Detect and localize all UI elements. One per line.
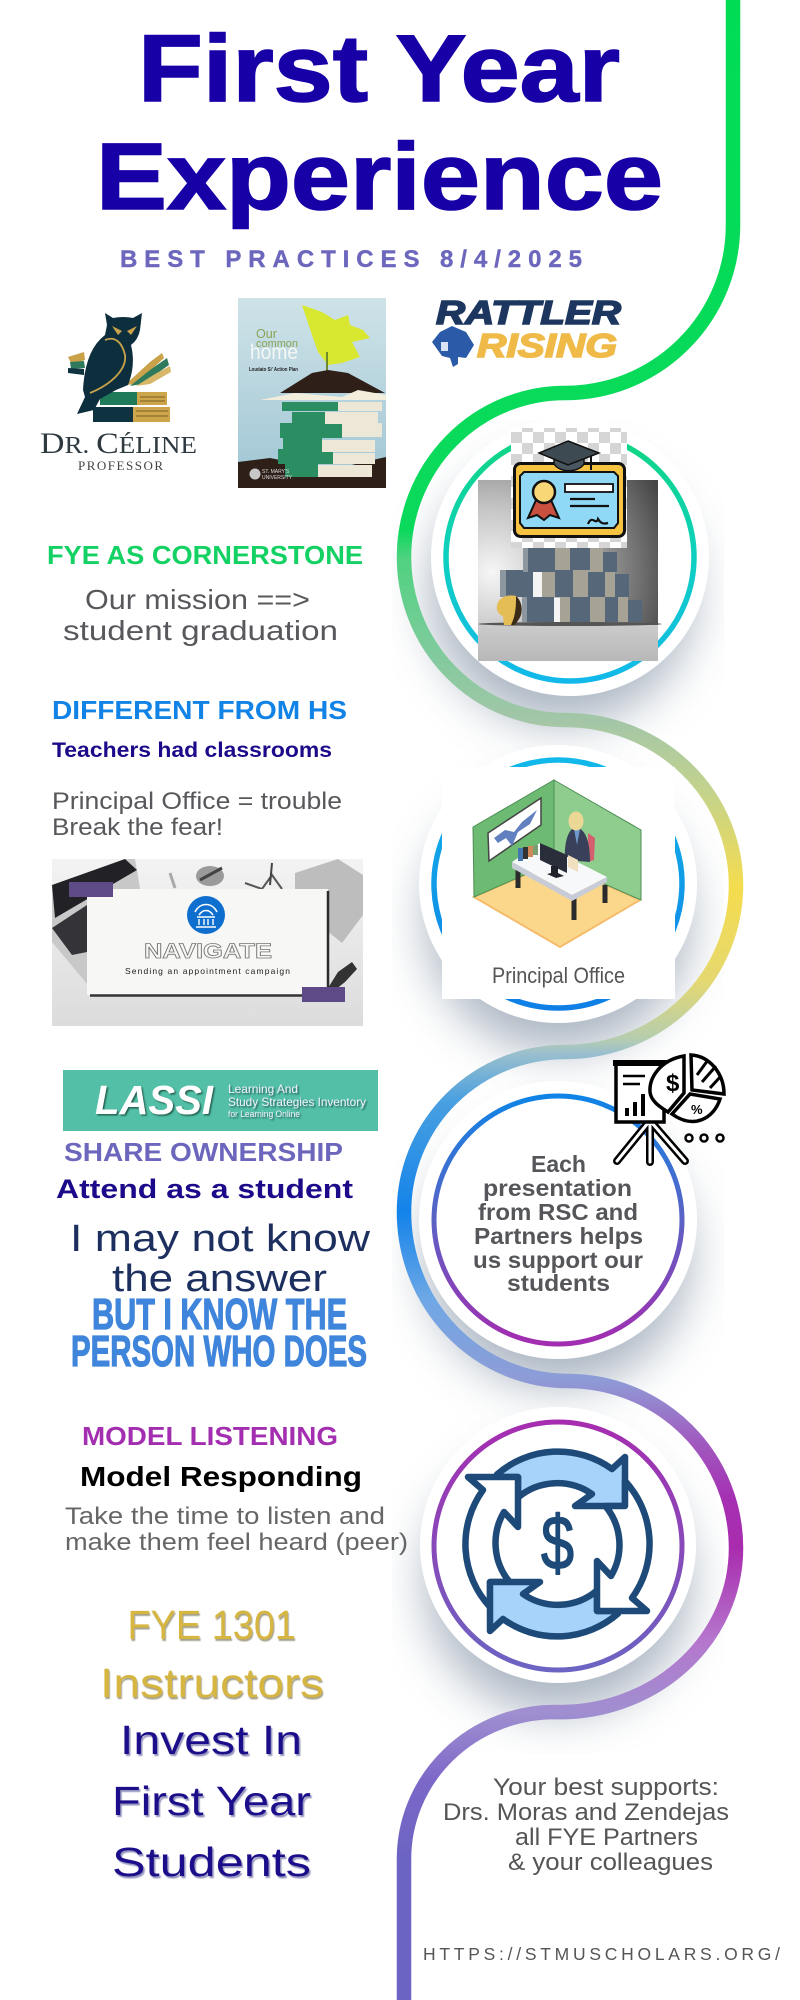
grey photo with block wall xyxy=(478,480,662,661)
section: share ownership: PERSON WHO DOES xyxy=(71,1327,367,1376)
circle 3 text: students xyxy=(507,1270,610,1296)
circle 3 text: Each xyxy=(531,1151,586,1177)
website url: HTTPS://STMUSCHOLARS.ORG/ xyxy=(423,1944,780,1964)
supports text block xyxy=(443,1774,729,1876)
section: different from HS: Teachers had classrooms xyxy=(52,739,332,762)
banner: LASSI: Learning And xyxy=(228,1082,298,1096)
section: FYE 1301 instructors: FYE 1301 xyxy=(128,1602,296,1648)
section: FYE as cornerstone: student graduation xyxy=(63,615,338,646)
circle 3 text xyxy=(473,1151,643,1296)
icon: circular arrows with dollar sign: $ xyxy=(541,1501,574,1586)
supports text block: Drs. Moras and Zendejas xyxy=(443,1799,729,1826)
poster: Our common home: Our xyxy=(256,326,278,341)
circle 3: presentations xyxy=(419,1055,724,1359)
icon: isometric office room xyxy=(473,780,641,947)
section: FYE 1301 instructors: Students xyxy=(112,1839,311,1885)
icon: presentation board and pie chart: % xyxy=(691,1102,703,1117)
section: different from HS xyxy=(52,695,347,841)
icon: circular arrows with dollar sign xyxy=(465,1452,650,1636)
banner: LASSI: LASSI xyxy=(95,1077,215,1123)
supports text block: Your best supports: xyxy=(493,1774,719,1801)
title: Experience xyxy=(96,124,663,230)
section: share ownership: Attend as a student xyxy=(56,1174,353,1204)
circle 3 text: from RSC and xyxy=(478,1199,638,1225)
circle 2: principal office xyxy=(419,745,697,1023)
section: share ownership: the answer xyxy=(112,1258,327,1300)
logo: Dr. Céline owl: DR. CÉLINE xyxy=(40,427,197,460)
section: FYE as cornerstone xyxy=(47,540,363,646)
logo: Dr. Céline owl xyxy=(40,313,197,473)
section: share ownership: SHARE OWNERSHIP xyxy=(64,1137,343,1167)
logo: Dr. Céline owl: PROFESSOR xyxy=(78,458,163,473)
section: model listening: make them feel heard (peer) xyxy=(65,1529,408,1556)
winding gradient path xyxy=(404,0,736,2000)
section: share ownership: BUT I KNOW THE xyxy=(92,1290,347,1339)
subtitle: BEST PRACTICES 8/4/2025 xyxy=(120,246,582,273)
title: First Year xyxy=(138,16,620,122)
section: model listening: MODEL LISTENING xyxy=(82,1421,338,1451)
icon: presentation board and pie chart: $ xyxy=(666,1070,680,1097)
section: FYE 1301 instructors: First Year xyxy=(112,1778,311,1824)
poster: Our common home: UNIVERSITY xyxy=(262,475,293,481)
banner: LASSI: Study Strategies Inventory xyxy=(228,1095,366,1109)
icon: presentation board and pie chart xyxy=(613,1055,724,1162)
section: FYE as cornerstone: Our mission ==> xyxy=(85,584,310,615)
circle 1: cornerstone xyxy=(431,418,709,696)
section: model listening: Model Responding xyxy=(80,1461,362,1492)
section: different from HS: Principal Office = trouble xyxy=(52,788,342,815)
logo: Rattler Rising: RATTLER xyxy=(436,294,621,331)
poster: Our common home: Loudato Si' Action Plan xyxy=(249,367,298,373)
circle 4: cycle of money xyxy=(420,1407,696,1683)
supports text block: & your colleagues xyxy=(508,1849,713,1876)
section: model listening xyxy=(65,1421,408,1556)
section: FYE 1301 instructors: Invest In xyxy=(120,1717,302,1763)
section: FYE as cornerstone: FYE AS CORNERSTONE xyxy=(47,540,363,570)
poster: Our common home: home xyxy=(250,341,298,364)
section: different from HS: Break the fear! xyxy=(52,814,223,841)
section: FYE 1301 instructors: Instructors xyxy=(100,1660,324,1706)
banner: LASSI: for Learning Online xyxy=(228,1109,300,1120)
title xyxy=(96,16,663,230)
image: Navigate appointment campaign: Sending an appointment campaign xyxy=(125,966,290,976)
logo: Rattler Rising xyxy=(432,294,621,367)
circle drop shadows xyxy=(426,460,694,1713)
icon: diploma certificate on checker background xyxy=(511,428,627,548)
poster: Our common home: ST. MARY'S xyxy=(262,469,290,475)
section: FYE 1301 instructors xyxy=(100,1602,324,1885)
circle 3 text: us support our xyxy=(473,1247,643,1273)
logo: Rattler Rising: RISING xyxy=(477,327,617,364)
banner: LASSI xyxy=(63,1070,378,1131)
section: share ownership xyxy=(56,1137,371,1376)
circle 3 text: presentation xyxy=(483,1175,632,1201)
circle 3 text: Partners helps xyxy=(474,1223,643,1249)
supports text block: all FYE Partners xyxy=(515,1824,698,1851)
icon: blue institution badge xyxy=(187,896,225,934)
office caption: Principal Office xyxy=(492,963,625,988)
section: different from HS: DIFFERENT FROM HS xyxy=(52,695,347,725)
section: share ownership: I may not know xyxy=(70,1218,371,1260)
section: model listening: Take the time to listen and xyxy=(65,1503,385,1530)
image: Navigate appointment campaign xyxy=(52,859,363,1026)
poster: Our common home xyxy=(238,298,386,488)
image: Navigate appointment campaign: NAVIGATE xyxy=(144,940,272,963)
poster: Our common home: common xyxy=(256,338,298,350)
